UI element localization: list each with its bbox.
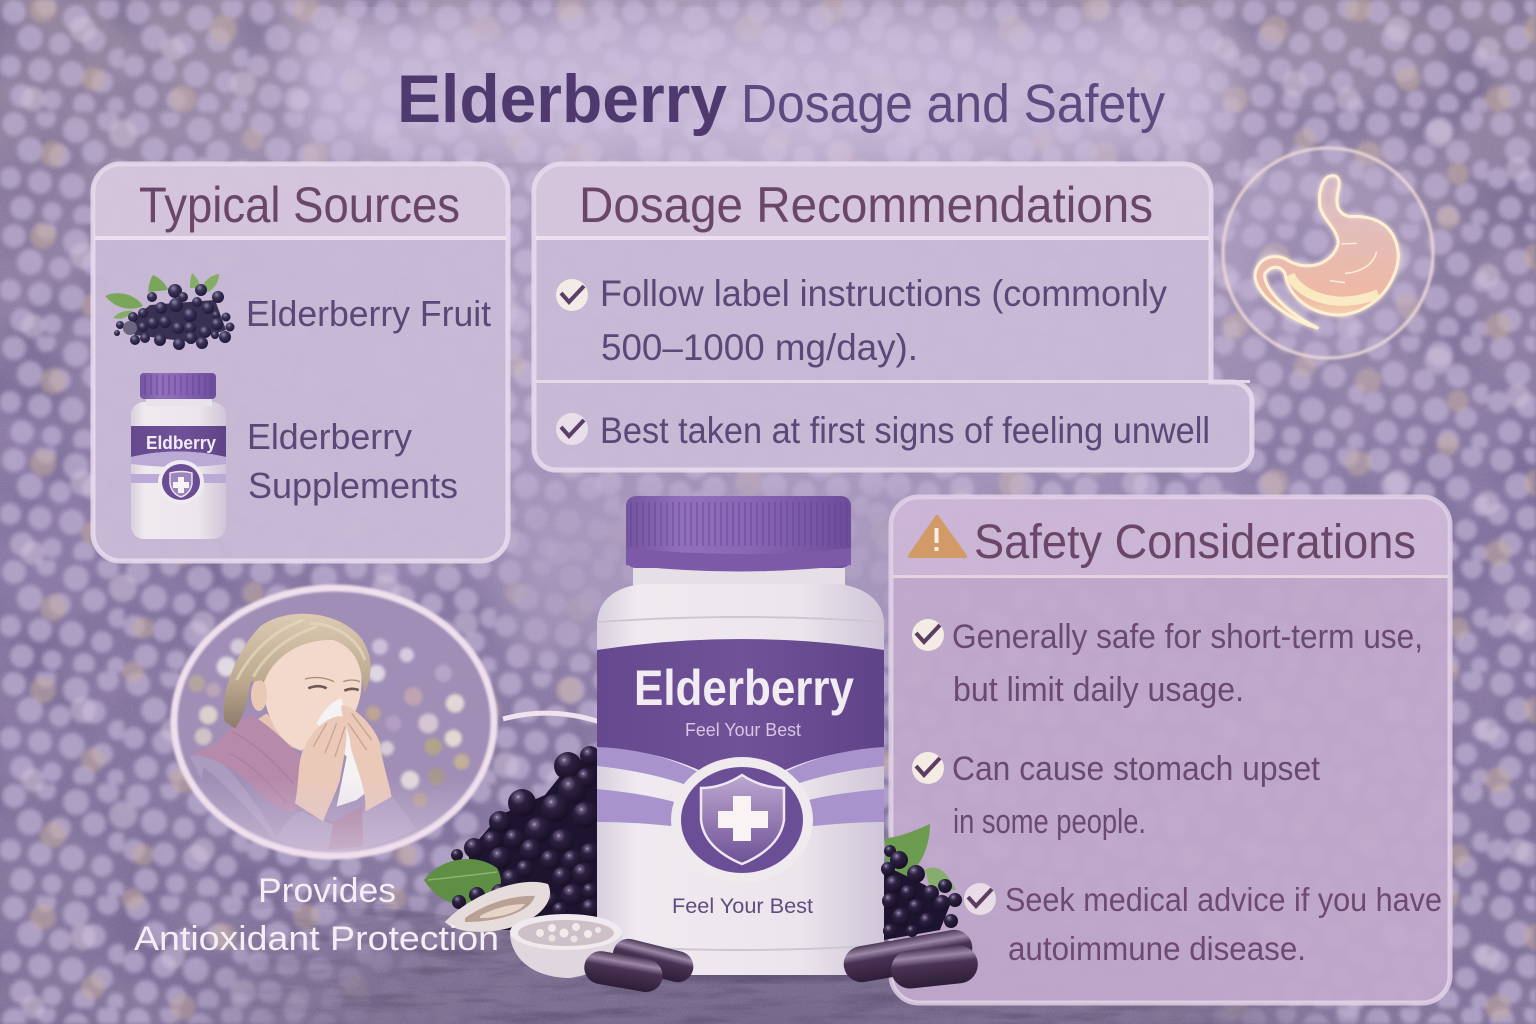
- text: label instructions: 500–1000 mg/day).: [601, 327, 918, 368]
- berries: left cluster with leaf: [424, 746, 600, 930]
- text: elderberry supplements: [247, 416, 458, 506]
- icon: sliced capsule shell: [445, 882, 550, 932]
- icon: bowl of powder: [510, 914, 622, 978]
- text: medical advice: autoimmune disease.: [1008, 930, 1306, 967]
- text: short-term use: but limit daily usage.: [953, 671, 1244, 709]
- capsules: right group: [841, 927, 980, 990]
- title: Elderberry: [397, 61, 727, 137]
- icon: check: [556, 279, 588, 311]
- bottle label text: Feel Your Best: [672, 895, 813, 918]
- text: short-term use: [952, 618, 1423, 709]
- text: label instructions: [600, 273, 1167, 368]
- flower bokeh behind woman: [188, 639, 470, 807]
- title: Dosage and Safety: [741, 74, 1165, 134]
- bottle label text: [634, 660, 854, 918]
- heading: dosage recommendations: Dosage Recommendations: [579, 177, 1153, 233]
- icon: stomach in glowing bubble: [1223, 148, 1433, 358]
- icon: elderberry fruit cluster: [105, 273, 234, 350]
- icon: check: [556, 413, 588, 445]
- heading: safety considerations: Safety Considerations: [974, 516, 1416, 569]
- bottle label text: Elderberry: [634, 660, 854, 716]
- hair: [224, 614, 371, 728]
- panel: typical sources: [93, 164, 508, 561]
- text: elderberry supplements: Supplements: [248, 465, 458, 506]
- bottle cap: [626, 496, 851, 572]
- text: provides antioxidant protection: [134, 872, 499, 958]
- text: elderberry fruit: Elderberry Fruit: [246, 293, 491, 334]
- capsules: left pair: [582, 936, 697, 995]
- text: provides antioxidant protection: Provides: [258, 872, 396, 910]
- text: short-term use: Generally safe for short-term use,: [952, 618, 1423, 656]
- icon: check: [964, 883, 996, 915]
- title: [397, 61, 1165, 137]
- neck: [257, 713, 303, 752]
- text: provides antioxidant protection: Antioxidant Protection: [134, 920, 499, 958]
- leaf: [424, 859, 501, 906]
- face: [263, 640, 362, 750]
- text: medical advice: [1005, 881, 1442, 967]
- photo: woman sneezing in ring: [170, 585, 500, 860]
- medallion with shield: [671, 757, 813, 883]
- heading: typical sources: Typical Sources: [139, 177, 460, 233]
- hands: [295, 716, 346, 822]
- text: first signs: Best taken at first signs of feeling unwell: [600, 410, 1210, 451]
- main bottle: [587, 496, 897, 982]
- bottle label band: [597, 639, 884, 830]
- text: stomach upset: in some people.: [953, 803, 1146, 841]
- bottle label text: Feel Your Best: [685, 720, 801, 740]
- panel: safety considerations: [891, 497, 1450, 1003]
- text: stomach upset: Can cause stomach upset: [952, 750, 1321, 788]
- text: medical advice: Seek medical advice if you have: [1005, 881, 1442, 918]
- icon: warning triangle: [910, 517, 965, 556]
- tissue: [317, 698, 369, 807]
- text: stomach upset: [952, 750, 1321, 841]
- text: label instructions: Follow label instructions (commonly: [600, 273, 1167, 314]
- icon: check: [912, 619, 944, 651]
- icon: check: [912, 752, 944, 784]
- scarf: [192, 715, 301, 811]
- connector from ring to bottle: [503, 713, 600, 722]
- icon: small supplement bottle: [131, 373, 226, 539]
- panel: dosage recommendations: [534, 164, 1252, 470]
- sweater: [190, 756, 408, 818]
- text: elderberry supplements: Elderberry: [247, 416, 412, 457]
- berries: right cluster with leaves: [881, 824, 962, 940]
- icon: small supplement bottle: Eldberry: [146, 433, 216, 453]
